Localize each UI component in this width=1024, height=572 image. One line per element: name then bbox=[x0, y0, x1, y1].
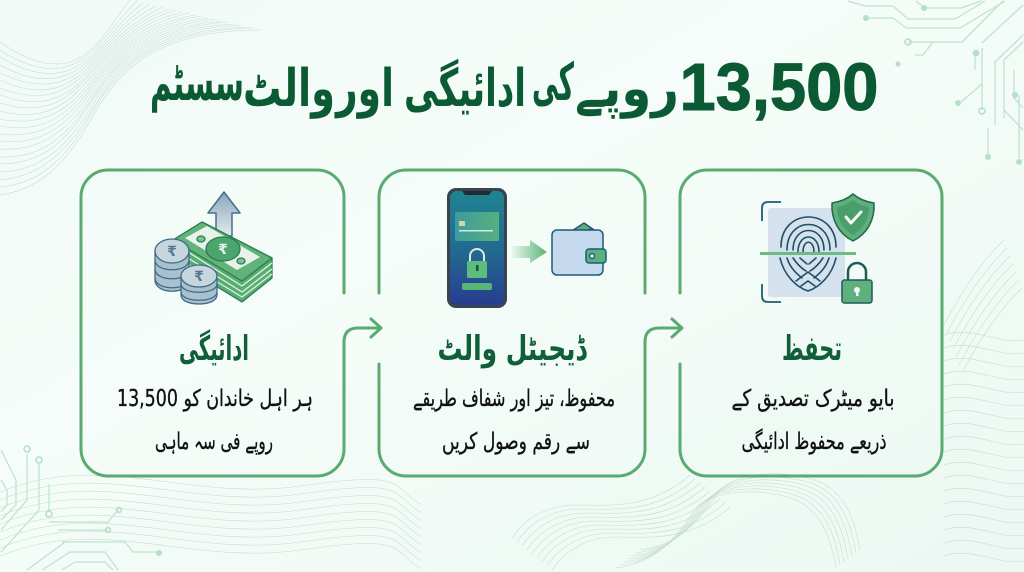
icon: money and coins bbox=[155, 192, 272, 304]
title: کی bbox=[532, 53, 574, 113]
coin stack right bbox=[181, 265, 217, 304]
icon: fingerprint scan bbox=[760, 202, 856, 302]
panel: digital wallet bbox=[379, 170, 682, 476]
background waves: right bbox=[944, 240, 1024, 562]
background waves: bottom right bbox=[512, 474, 860, 570]
arrow head 2 bbox=[672, 319, 682, 337]
icon: wallet bbox=[552, 223, 606, 275]
heading: payment: ادائیگی bbox=[179, 329, 249, 369]
body: payment bbox=[117, 386, 313, 455]
title: والٹ bbox=[243, 59, 335, 119]
body: digital wallet: محفوظ، تیز اور شفاف طریقے bbox=[413, 386, 615, 412]
rupee signs: ₹ bbox=[167, 244, 177, 260]
title: ادائیگی bbox=[404, 58, 526, 119]
title: اور bbox=[334, 59, 394, 119]
body: security bbox=[732, 386, 894, 455]
arrow to wallet bbox=[512, 240, 547, 263]
rupee signs bbox=[167, 242, 228, 285]
panel: payment bbox=[81, 170, 381, 476]
panel 1 outline bbox=[81, 170, 380, 476]
heading: security: تحفظ bbox=[782, 329, 842, 369]
banknote stack bbox=[173, 222, 272, 302]
coin stack left bbox=[155, 239, 189, 291]
body: digital wallet: سے رقم وصول کریں bbox=[442, 429, 590, 455]
body: payment: روپے فی سہ ماہی bbox=[155, 429, 273, 455]
icon: up arrow bbox=[208, 192, 240, 236]
rupee signs: ₹ bbox=[218, 242, 228, 258]
rupee signs: ₹ bbox=[194, 269, 204, 285]
title: روپے bbox=[575, 59, 679, 119]
background waves: top left bbox=[0, 0, 260, 195]
panel 2 outline bbox=[379, 170, 681, 476]
body: digital wallet bbox=[413, 386, 615, 455]
panel: security bbox=[680, 170, 942, 476]
body: payment: ہر اہل خاندان کو 13,500 bbox=[117, 386, 313, 412]
title: 13,500 bbox=[680, 50, 878, 125]
circuit decoration: bottom left bbox=[1, 446, 162, 570]
panel 3 outline bbox=[680, 170, 942, 476]
title bbox=[150, 50, 878, 125]
icon: phone bbox=[447, 188, 507, 308]
body: security: بایو میٹرک تصدیق کے bbox=[732, 386, 894, 412]
icon: shield bbox=[832, 194, 874, 241]
background waves: bottom left bbox=[0, 475, 420, 568]
title: سسٹم bbox=[150, 53, 244, 113]
body: security: ذریعے محفوظ ادائیگی bbox=[742, 428, 886, 455]
icon: padlock bbox=[842, 263, 872, 303]
arrow head 1 bbox=[371, 319, 381, 337]
circuit decoration: top right bbox=[848, 1, 1023, 165]
heading: digital wallet: ڈیجیٹل والٹ bbox=[438, 329, 588, 369]
